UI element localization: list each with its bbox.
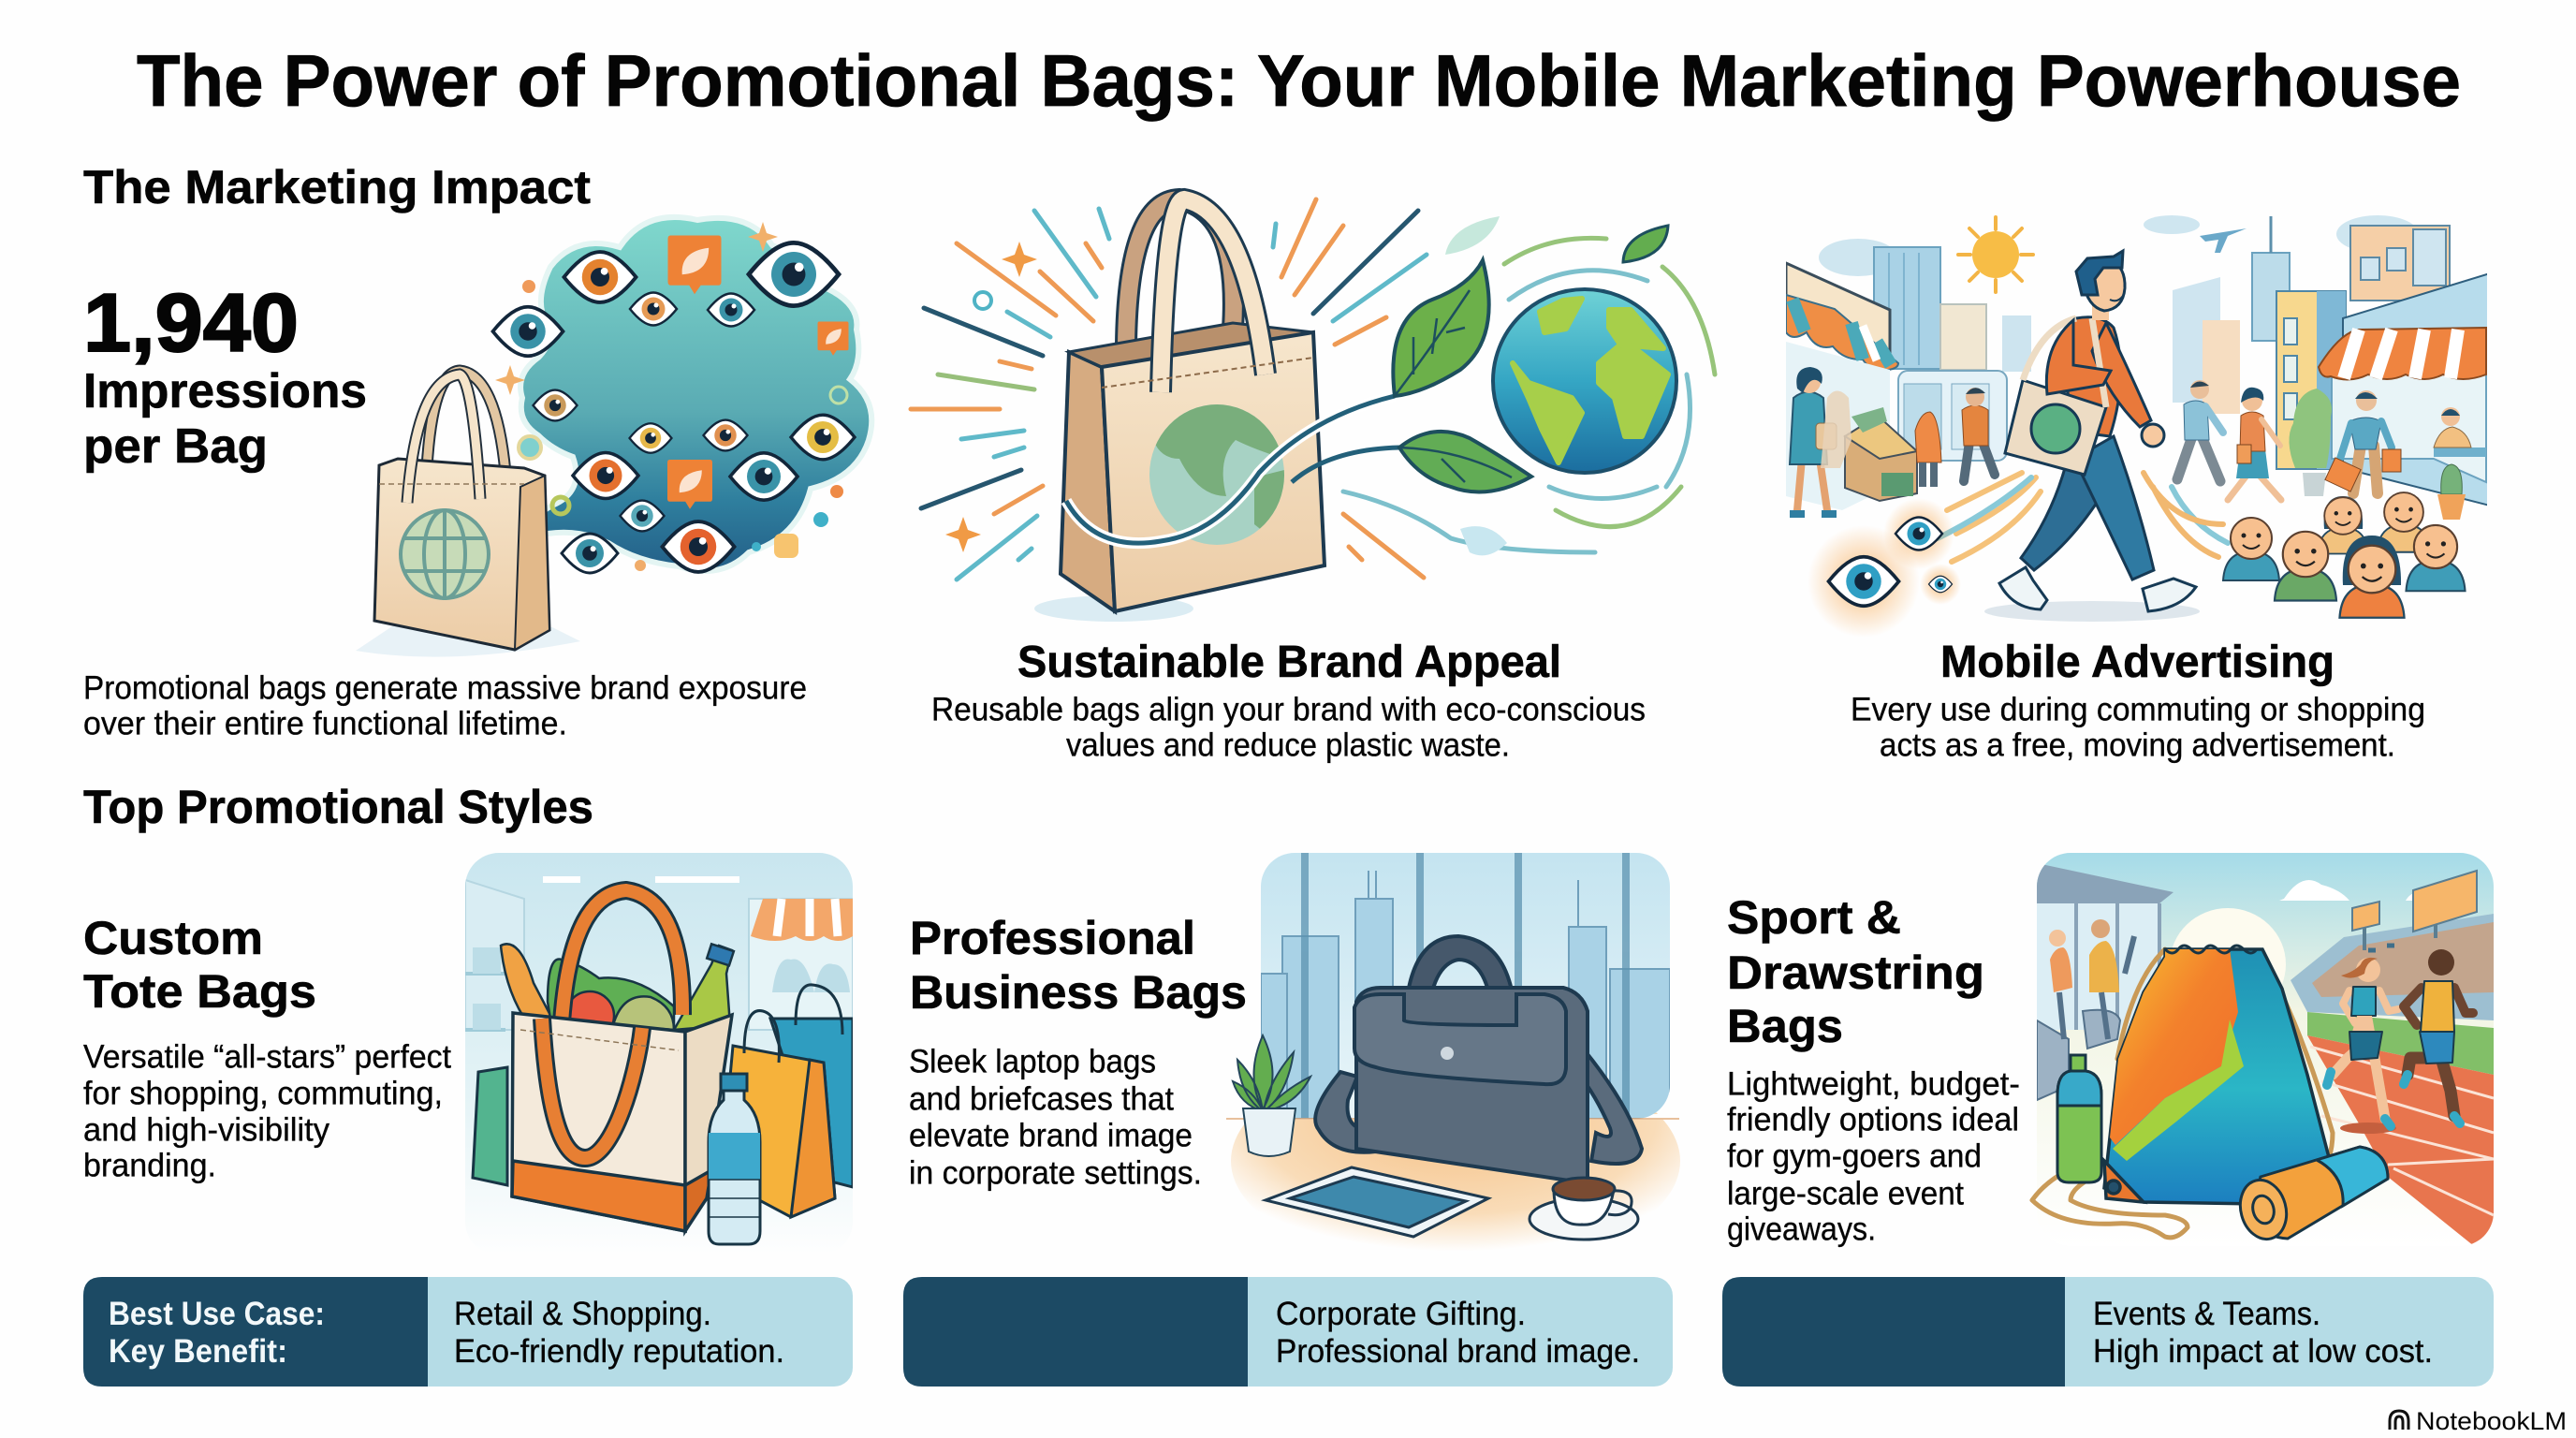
description	[1727, 1065, 2020, 1247]
shopper at store	[2325, 390, 2401, 493]
coffee cup	[1530, 1178, 1638, 1240]
description	[931, 691, 1646, 764]
tote	[512, 890, 732, 1231]
sun	[1958, 217, 2033, 292]
stat label: Impressions	[83, 364, 367, 418]
illustration: city street with walker	[1786, 215, 2490, 638]
stat label: per Bag	[83, 419, 268, 474]
description: values and reduce plastic waste.	[1066, 726, 1510, 764]
gym	[2037, 863, 2174, 1100]
description: Versatile “all-stars” perfect	[83, 1039, 451, 1075]
heading: the marketing impact: The Marketing Impact	[83, 161, 591, 213]
child in orange	[1915, 412, 1941, 462]
illustration: drawstring bag at stadium	[2032, 853, 2494, 1246]
bar values: Events & Teams.	[2093, 1296, 2320, 1332]
man in blue	[2177, 380, 2223, 481]
illustration: business bag on desk	[1226, 853, 1685, 1269]
bar labels: Best Use Case:	[109, 1296, 325, 1332]
bar values	[2093, 1296, 2433, 1370]
description: giveaways.	[1727, 1211, 1876, 1247]
heading: Sustainable Brand Appeal	[1017, 638, 1561, 687]
walking man with tote	[1984, 251, 2200, 622]
bar values	[1276, 1296, 1640, 1370]
office window with skyline	[1261, 853, 1670, 1120]
comparison bar	[903, 1277, 1673, 1387]
title: The Power of Promotional Bags: Your Mobile Marketing Powerhouse	[137, 39, 2461, 122]
vine and leaves	[1066, 216, 1668, 555]
panel: professional business bags	[903, 853, 1685, 1387]
eyes	[1808, 498, 1961, 638]
bystanders	[1790, 367, 2471, 520]
heading: Professional	[910, 912, 1195, 964]
bar values	[454, 1296, 784, 1370]
cords	[2032, 949, 2333, 1238]
bar values: Corporate Gifting.	[1276, 1296, 1526, 1332]
shop clerk	[2434, 407, 2471, 448]
heading: Bags	[1727, 1000, 1843, 1052]
comparison bar	[83, 1277, 853, 1387]
description: large-scale event	[1727, 1176, 1964, 1211]
description	[83, 1039, 451, 1183]
heading: top promotional styles: Top Promotional Styles	[83, 781, 593, 833]
woman at stall	[1790, 367, 1837, 518]
market stall	[1845, 407, 1917, 501]
heading: Sport &	[1727, 891, 1901, 944]
description: for shopping, commuting,	[83, 1075, 443, 1112]
panel: impressions statistic	[83, 217, 871, 657]
heading	[1727, 891, 1984, 1052]
rolled towel	[2234, 1147, 2388, 1244]
stat label	[83, 364, 367, 474]
plant	[1233, 1035, 1310, 1156]
bar labels	[109, 1296, 325, 1370]
illustration: eco tote and earth	[911, 199, 1715, 622]
text: impact description	[83, 670, 807, 741]
comparison bar	[1722, 1277, 2494, 1387]
bar labels: Key Benefit:	[109, 1333, 287, 1370]
heading: Custom	[83, 912, 263, 964]
bar values: High impact at low cost.	[2093, 1333, 2433, 1370]
panel: mobile advertising	[1786, 215, 2490, 764]
bar values: Professional brand image.	[1276, 1333, 1640, 1370]
description: branding.	[83, 1148, 216, 1183]
icon: tote bag with globe	[356, 371, 580, 657]
bar values: Retail & Shopping.	[454, 1296, 711, 1332]
description: Reusable bags align your brand with eco-conscious	[931, 691, 1646, 728]
plane	[2200, 228, 2247, 253]
panel: custom tote bags	[83, 853, 853, 1387]
description: for gym-goers and	[1727, 1138, 1982, 1174]
stadium	[2291, 871, 2494, 1246]
water bottle	[709, 1074, 760, 1244]
text: impact description: over their entire functional lifetime.	[83, 706, 567, 741]
description: friendly options ideal	[1727, 1101, 2019, 1138]
man in orange	[1962, 388, 1995, 481]
cactus	[2441, 464, 2462, 494]
woman in skirt	[2228, 388, 2281, 500]
bar values: Eco-friendly reputation.	[454, 1333, 784, 1370]
panel: sport and drawstring bags	[1722, 853, 2494, 1387]
heading: Mobile Advertising	[1940, 638, 2334, 687]
text: impact description: Promotional bags generate massive brand exposure	[83, 670, 807, 706]
description: and high-visibility	[83, 1112, 329, 1148]
description: Lightweight, budget-	[1727, 1065, 2020, 1103]
description	[909, 1043, 1202, 1191]
description	[1851, 691, 2425, 764]
panel: sustainable brand appeal	[911, 199, 1715, 764]
produce	[501, 944, 734, 1040]
illustration: tote in a shop	[465, 853, 853, 1255]
tree	[2289, 389, 2332, 496]
briefcase	[1315, 936, 1642, 1183]
shopping bags	[473, 985, 853, 1217]
heading	[83, 912, 316, 1018]
description: elevate brand image	[909, 1118, 1193, 1153]
heading: Tote Bags	[83, 965, 316, 1018]
description: and briefcases that	[909, 1080, 1174, 1118]
crowd faces	[2223, 492, 2466, 618]
runners	[2327, 949, 2473, 1134]
description: in corporate settings.	[909, 1155, 1202, 1191]
description: acts as a free, moving advertisement.	[1880, 726, 2395, 764]
heading: Business Bags	[910, 966, 1247, 1019]
bag	[1061, 199, 1325, 611]
heading	[910, 912, 1247, 1019]
big number: 1,940	[83, 276, 299, 369]
notebooklm watermark: NotebookLM	[2416, 1407, 2567, 1435]
illustration: speech cloud of eyes	[356, 217, 871, 657]
heading: Drawstring	[1727, 946, 1984, 999]
drawstring bag	[2104, 946, 2330, 1204]
description: Every use during commuting or shopping	[1851, 691, 2425, 728]
tablet	[1266, 1167, 1488, 1237]
motion trails	[1938, 473, 2228, 562]
description: Sleek laptop bags	[909, 1043, 1156, 1080]
icon: earth globe	[1493, 289, 1676, 473]
water bottle	[2057, 1055, 2101, 1182]
desk	[1231, 1053, 1680, 1269]
